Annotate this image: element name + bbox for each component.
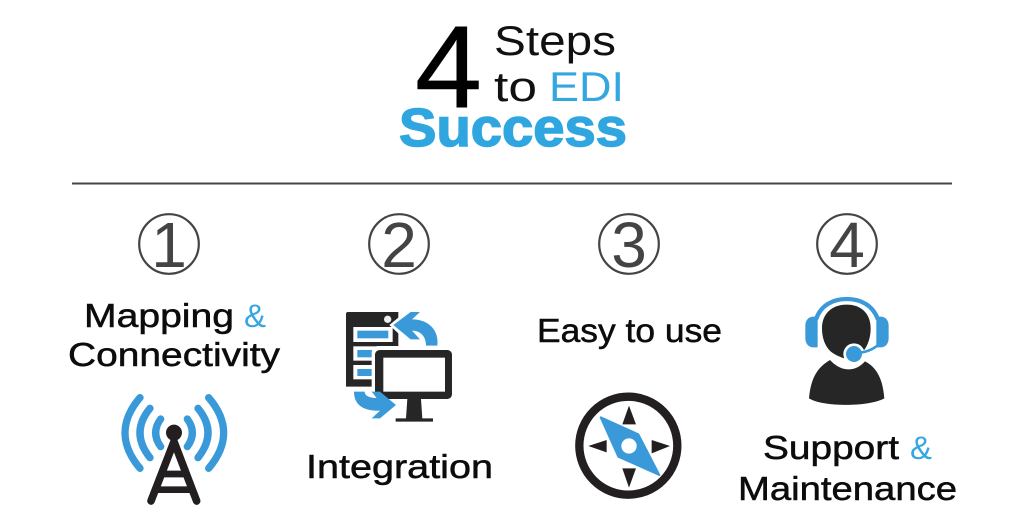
number 4 [817,209,877,281]
heading: Easy to use: Easy to use [537,312,722,349]
title: to: to [494,63,537,110]
title: Steps: Steps [494,17,616,64]
heading: Support & Maintenance: Maintenance [738,470,957,507]
title: Success: Success [399,98,627,158]
number 2 [369,209,429,281]
icon: support headset [805,299,889,405]
heading: Integration: Integration [306,448,493,485]
heading: Mapping & Connectivity: Mapping [84,297,234,334]
icon: antenna [125,398,224,501]
icon: integration [346,309,456,422]
number 2: 2 [381,209,417,281]
icon: compass [579,397,677,495]
step 1 [68,209,281,501]
step 3 [537,209,722,495]
step 2 [306,209,493,485]
number 3 [599,209,659,281]
heading: Support & Maintenance: Support [763,429,899,466]
heading: Mapping & Connectivity [68,297,281,373]
step 4 [738,209,957,507]
title [399,1,627,158]
heading: Support & Maintenance [738,429,957,507]
heading: Support & Maintenance: & [910,430,932,466]
title: big 4: 4 [415,1,482,132]
heading: Mapping & Connectivity: & [244,298,266,334]
number 1 [139,209,199,281]
number 3: 3 [611,209,647,281]
number 4: 4 [829,209,865,281]
title: EDI: EDI [549,63,624,110]
number 1: 1 [151,209,187,281]
heading: Mapping & Connectivity: Connectivity [68,336,281,373]
